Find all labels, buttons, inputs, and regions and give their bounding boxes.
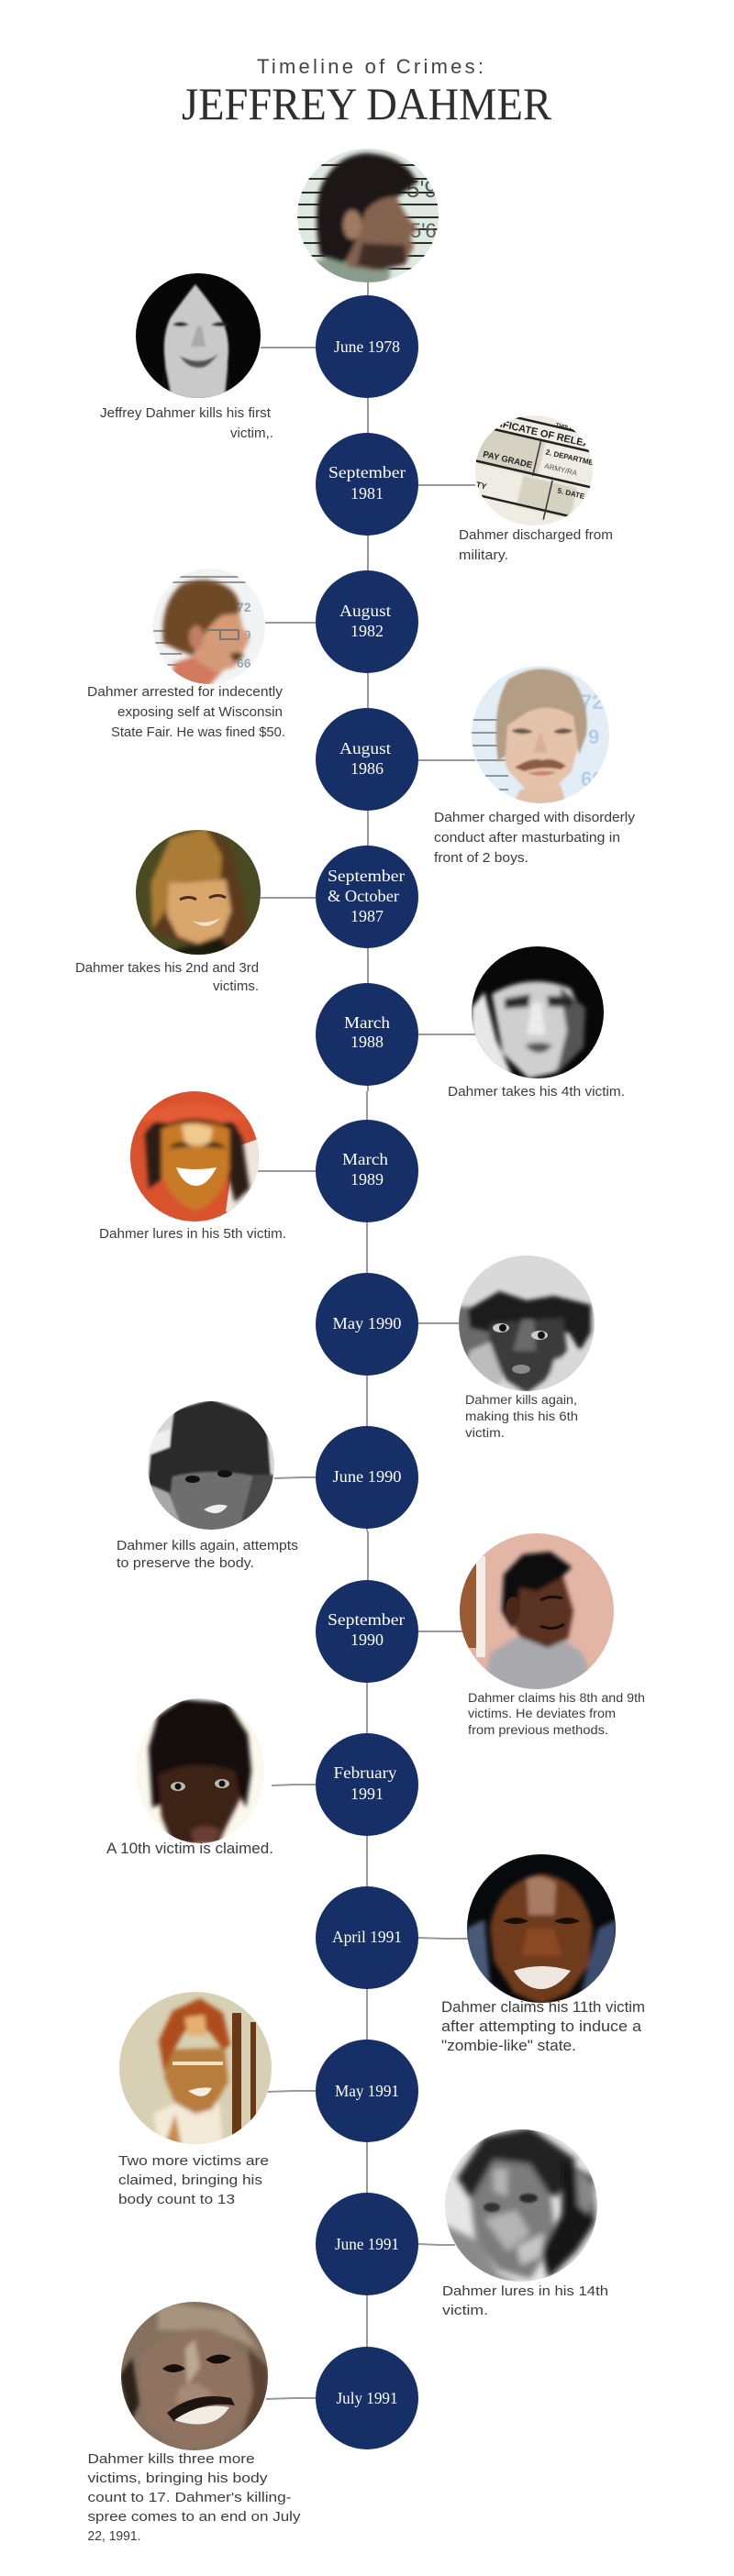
portrait: Dahmer 1986 mugshot: 9 [588, 725, 599, 748]
caption: Dahmer arrested for indecently [87, 684, 284, 700]
date label: 1989 [350, 1170, 384, 1188]
portrait: discharge document: 2. DEPARTMENT [545, 448, 604, 470]
date label: June 1991 [335, 2235, 399, 2253]
date label: June 1990 [332, 1467, 402, 1486]
date label: 1981 [350, 484, 384, 503]
caption: victim. [465, 1426, 505, 1440]
date label: July 1991 [336, 2389, 398, 2407]
date label: 1988 [350, 1033, 384, 1051]
date label: 1991 [350, 1785, 384, 1803]
caption [465, 1393, 578, 1440]
caption: victims. He deviates from [468, 1707, 616, 1720]
connector [261, 897, 316, 899]
event: June 1978 [100, 271, 418, 441]
date node [316, 846, 418, 948]
caption: Dahmer kills again, attempts [117, 1538, 298, 1553]
date node [316, 570, 418, 673]
portrait: discharge document: THIS IS AN IM [555, 423, 592, 437]
portrait: 6th victim [457, 1254, 596, 1393]
connector [265, 622, 316, 624]
date node [316, 2347, 418, 2449]
caption [459, 527, 613, 563]
connector [418, 1034, 475, 1035]
caption: Dahmer lures in his 5th victim. [99, 1226, 286, 1242]
date label: 1987 [350, 907, 384, 925]
caption [441, 1999, 645, 2054]
event: April 1991 [316, 1852, 645, 2054]
date node [316, 433, 418, 536]
date node [316, 2193, 418, 2295]
event: June 1990 [117, 1399, 418, 1571]
caption: Dahmer lures in his 14th [442, 2283, 608, 2299]
portrait: first victim [134, 271, 262, 400]
caption: "zombie-like" state. [441, 2038, 576, 2054]
caption: A 10th victim is claimed. [106, 1841, 273, 1857]
title block [182, 55, 552, 129]
portrait: Dahmer 1986 mugshot: 72 [581, 691, 603, 713]
connector [272, 1785, 316, 1786]
event: June 1991 [316, 2128, 608, 2318]
event: February 1991 [106, 1697, 418, 1857]
portrait: Dahmer 1986 mugshot: 66 [581, 768, 603, 790]
event: March 1988 [316, 944, 625, 1100]
caption: victims, bringing his body [88, 2471, 268, 2486]
portrait: victims 2 and 3 [134, 828, 262, 956]
portrait: Dahmer mugshot profile: 5'6 [410, 219, 437, 242]
portrait: final victims [119, 2301, 270, 2451]
connector [418, 484, 475, 486]
portrait: 14th victim [443, 2128, 599, 2283]
portrait: Dahmer 1986 mugshot [472, 666, 609, 803]
portrait: Dahmer mugshot profile: 5'9 [406, 175, 438, 203]
portrait: discharge document: TY [475, 480, 487, 492]
date node [316, 1273, 418, 1376]
connector [418, 2244, 455, 2245]
caption [442, 2283, 608, 2318]
event: August 1986 [316, 661, 636, 866]
caption [88, 2451, 301, 2544]
date node [316, 983, 418, 1086]
date node [316, 1426, 418, 1529]
caption: making this his 6th [465, 1410, 578, 1423]
portrait: 5th victim [128, 1090, 261, 1222]
caption [75, 960, 259, 994]
caption: Dahmer discharged from [459, 527, 613, 543]
date label: September [328, 1610, 405, 1629]
event: September 1990 [316, 1532, 645, 1737]
portrait: discharge document: ARMY/RA [543, 462, 579, 478]
date node [316, 1580, 418, 1683]
caption: from previous methods. [468, 1723, 608, 1737]
date label: March [342, 1150, 388, 1168]
caption: after attempting to induce a [441, 2018, 642, 2035]
portrait: 4th victim [469, 944, 606, 1081]
date node [316, 1886, 418, 1989]
caption: front of 2 boys. [434, 850, 528, 866]
caption [100, 405, 273, 441]
caption: to preserve the body. [117, 1555, 254, 1571]
caption: Dahmer claims his 11th victim [441, 1999, 645, 2016]
caption [434, 810, 636, 866]
connector [268, 2091, 316, 2092]
date label: 1990 [350, 1631, 384, 1649]
connector [274, 1477, 316, 1478]
caption [87, 684, 285, 740]
date label: August [339, 602, 391, 620]
date node [316, 1733, 418, 1836]
event: March 1989 [99, 1090, 418, 1242]
caption: victims. [213, 978, 259, 994]
date label: May 1991 [335, 2082, 399, 2100]
caption: State Fair. He was fined $50. [111, 724, 285, 740]
caption: exposing self at Wisconsin [117, 704, 283, 720]
portrait: Dahmer 1982 mugshot: 72 [237, 600, 251, 614]
portrait: discharge document: PAY GRADE [482, 449, 533, 470]
portrait: victims 8 and 9 [458, 1532, 616, 1694]
date label: & October [328, 887, 399, 905]
caption: body count to 13 [118, 2192, 235, 2207]
caption [468, 1691, 645, 1737]
main heading: JEFFREY DAHMER [182, 78, 552, 129]
date node [316, 2040, 418, 2142]
date label: June 1978 [334, 337, 400, 356]
event: September & October 1987 [75, 828, 418, 994]
portrait: 10th victim [134, 1697, 266, 1844]
portrait: victims 12 and 13 [117, 1990, 273, 2146]
caption: spree comes to an end on July [88, 2509, 301, 2525]
date label: 1986 [350, 759, 384, 778]
connector [418, 1938, 469, 1939]
portrait: discharge document: 5. DATE [557, 486, 586, 501]
caption [118, 2153, 269, 2207]
event: August 1982 [87, 567, 418, 740]
date node [316, 708, 418, 811]
caption: Dahmer takes his 2nd and 3rd [75, 960, 259, 976]
date label: August [339, 739, 391, 757]
portrait: 11th victim [465, 1852, 617, 2005]
caption: victim,. [230, 426, 273, 441]
portrait: Dahmer 1982 mugshot: 66 [237, 656, 251, 670]
caption: claimed, bringing his [118, 2172, 262, 2188]
connector [258, 1170, 316, 1172]
date label: March [344, 1013, 390, 1032]
caption: Jeffrey Dahmer kills his first [100, 405, 272, 421]
portrait: Dahmer mugshot profile [297, 149, 439, 282]
caption: 22, 1991. [88, 2528, 141, 2544]
vertical timeline line [367, 282, 368, 2348]
event: July 1991 [88, 2301, 418, 2544]
event: May 1991 [117, 1990, 418, 2207]
connector [418, 1631, 462, 1632]
portrait: 7th victim [145, 1399, 277, 1531]
event: September 1981 [316, 415, 612, 562]
caption: victim. [442, 2303, 488, 2318]
caption: Dahmer kills again, [465, 1393, 577, 1407]
date node [316, 295, 418, 398]
date label: May 1990 [332, 1314, 402, 1332]
caption: count to 17. Dahmer's killing- [88, 2490, 292, 2505]
caption: conduct after masturbating in [434, 830, 620, 846]
caption: Two more victims are [118, 2153, 269, 2169]
date label: February [334, 1763, 396, 1782]
connector [261, 347, 316, 348]
event: May 1990 [316, 1254, 596, 1440]
date label: 1982 [350, 622, 384, 640]
caption: Dahmer claims his 8th and 9th [468, 1691, 645, 1705]
portrait: Dahmer 1982 mugshot: 59 [237, 627, 251, 642]
date label: April 1991 [332, 1928, 402, 1946]
caption: Dahmer kills three more [88, 2451, 255, 2467]
caption: Dahmer takes his 4th victim. [448, 1084, 625, 1100]
caption [117, 1538, 298, 1571]
connector [418, 759, 475, 761]
date node [316, 1120, 418, 1222]
caption: Dahmer charged with disorderly [434, 810, 636, 825]
portrait: Dahmer 1982 mugshot [153, 569, 265, 684]
caption: military. [459, 547, 508, 563]
connector [418, 1322, 459, 1324]
portrait: discharge document [475, 415, 593, 525]
portrait: discharge document: RTIFICATE OF RELEASE [485, 415, 605, 453]
date label: September [328, 867, 405, 885]
connector [266, 2398, 316, 2399]
subtitle: Timeline of Crimes: [257, 55, 484, 78]
date label: September [328, 463, 406, 481]
